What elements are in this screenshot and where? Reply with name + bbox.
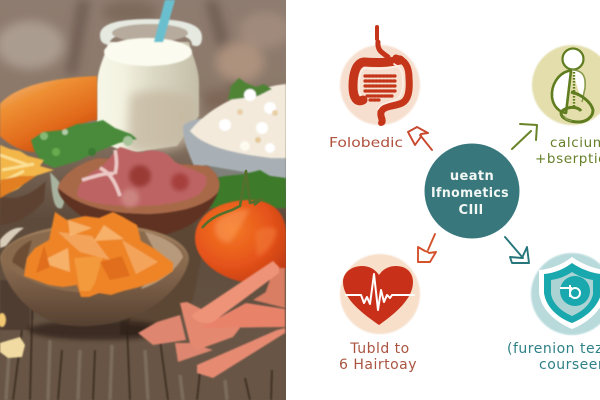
panel: right infographic [286, 0, 600, 400]
icon: shield [531, 253, 600, 335]
central circle text: CIll [459, 203, 483, 218]
node: shield [505, 237, 600, 373]
wood table planks [0, 200, 286, 400]
arrow: up-left red [408, 127, 432, 150]
node: calcium absorption [512, 45, 600, 167]
photo item: crumbs [0, 228, 25, 358]
photo item: glass milk jar [97, 19, 202, 152]
photo item: ham strips [138, 261, 285, 378]
photo item: meat bowl [58, 147, 220, 236]
arrow: up-right green [512, 124, 537, 149]
photo item: shredded cheese bowl at left [0, 145, 54, 225]
central circle text: Ifnometics [431, 186, 509, 201]
central teal circle [424, 144, 520, 238]
photo item: blue straw [154, 0, 175, 42]
node: heart health [339, 234, 436, 373]
icon: green spiral figure [532, 45, 600, 125]
panel: food photograph [0, 0, 291, 400]
node: central circle [424, 144, 520, 238]
photo item: orange fruit [0, 76, 97, 152]
arrow: down-left red [418, 234, 436, 262]
photo item: green herbs [31, 120, 286, 208]
node: digestive health [329, 27, 432, 151]
central circle text: ueatn [450, 169, 494, 184]
arrow: down-right teal [505, 237, 529, 263]
photo item: tomato [195, 171, 286, 283]
photo item: orange flakes bowl [0, 224, 189, 326]
label: Folobedic: Folobedic [329, 135, 403, 151]
photo item: orange flakes [24, 212, 173, 297]
label: Tubld to 6 Hairtoay: Tubld to [349, 341, 410, 357]
icon: heart with pulse [340, 254, 420, 334]
label: Tubld to 6 Hairtoay: 6 Hairtoay [339, 357, 417, 373]
photo item: rice bowl [183, 78, 286, 190]
icon: intestines [340, 27, 420, 126]
